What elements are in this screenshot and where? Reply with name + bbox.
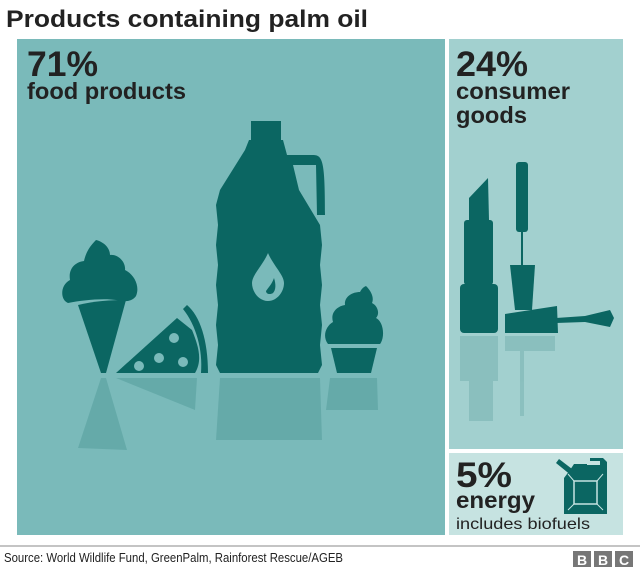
consumer label: consumer	[456, 78, 570, 104]
icon: lipstick	[460, 178, 498, 333]
icon: cupcake	[325, 286, 383, 373]
consumer percentage: 24%	[456, 45, 528, 84]
icon: mascara	[505, 162, 614, 333]
reflections	[78, 378, 378, 450]
icon: oil drop	[252, 253, 284, 301]
energy note: includes biofuels	[456, 516, 590, 533]
panel: food products	[17, 39, 445, 535]
energy label: energy	[456, 487, 535, 513]
footer divider	[0, 545, 640, 547]
logo: BBC: B	[577, 552, 587, 568]
title: Products containing palm oil	[6, 6, 368, 33]
energy percentage: 5%	[456, 456, 512, 495]
icon: jerry can	[556, 458, 607, 514]
logo: BBC	[573, 551, 633, 568]
logo: BBC: C	[619, 552, 629, 568]
food percentage: 71%	[27, 45, 98, 84]
reflections	[460, 336, 555, 421]
panel: energy	[449, 453, 623, 535]
icon: oil bottle	[216, 121, 325, 373]
food label: food products	[27, 78, 186, 104]
icon: ice cream	[62, 240, 137, 373]
logo: BBC: B	[598, 552, 608, 568]
panel: consumer goods	[449, 39, 623, 449]
panel: consumer goods: goods	[456, 102, 527, 128]
source: Source: World Wildlife Fund, GreenPalm, Rainforest Rescue/AGEB	[4, 550, 343, 565]
icon: pizza	[116, 305, 208, 373]
